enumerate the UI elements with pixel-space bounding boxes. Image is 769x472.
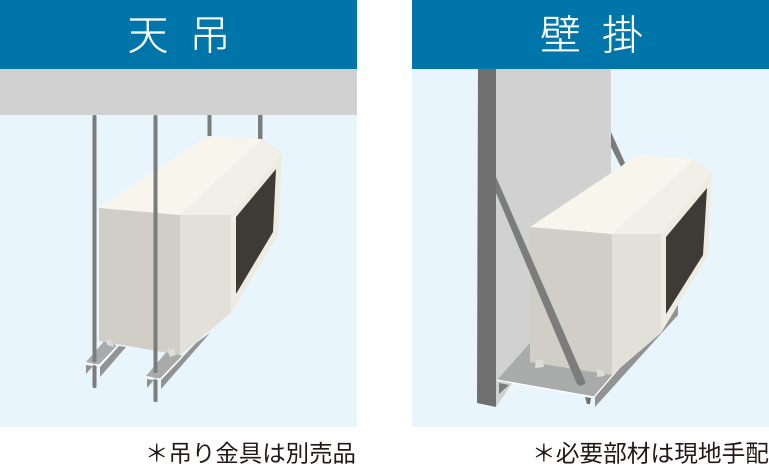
wall post <box>477 69 496 407</box>
front rods upper part <box>92 115 158 373</box>
panel background <box>412 69 769 427</box>
heading: ceiling: 天 <box>128 12 168 58</box>
heading: ceiling: 吊 <box>190 12 230 58</box>
heading: wall: 壁 <box>540 12 581 58</box>
caption: ceiling: ＊吊り金具は別売品 <box>145 440 356 466</box>
wall <box>496 69 611 381</box>
bracket rail <box>499 305 678 407</box>
panel: ceiling mounted <box>0 0 357 427</box>
mounting rail: right <box>146 333 210 389</box>
panel: wall mounted <box>412 0 769 427</box>
caption: wall: ＊必要部材は現地手配 <box>532 440 769 466</box>
panel background <box>0 69 357 427</box>
heading: ceiling <box>0 0 357 69</box>
front brace <box>496 177 585 386</box>
rear brace <box>611 132 625 167</box>
outdoor unit <box>530 155 712 377</box>
outdoor unit <box>99 136 282 357</box>
front rods lower part <box>92 360 158 402</box>
heading: wall <box>412 0 769 69</box>
rear hanging rods <box>208 115 262 140</box>
heading: wall: 掛 <box>602 12 643 58</box>
mounting rail: left <box>86 339 126 377</box>
wall lower part <box>496 380 513 407</box>
bracket plate <box>497 343 625 397</box>
ceiling <box>0 69 357 115</box>
